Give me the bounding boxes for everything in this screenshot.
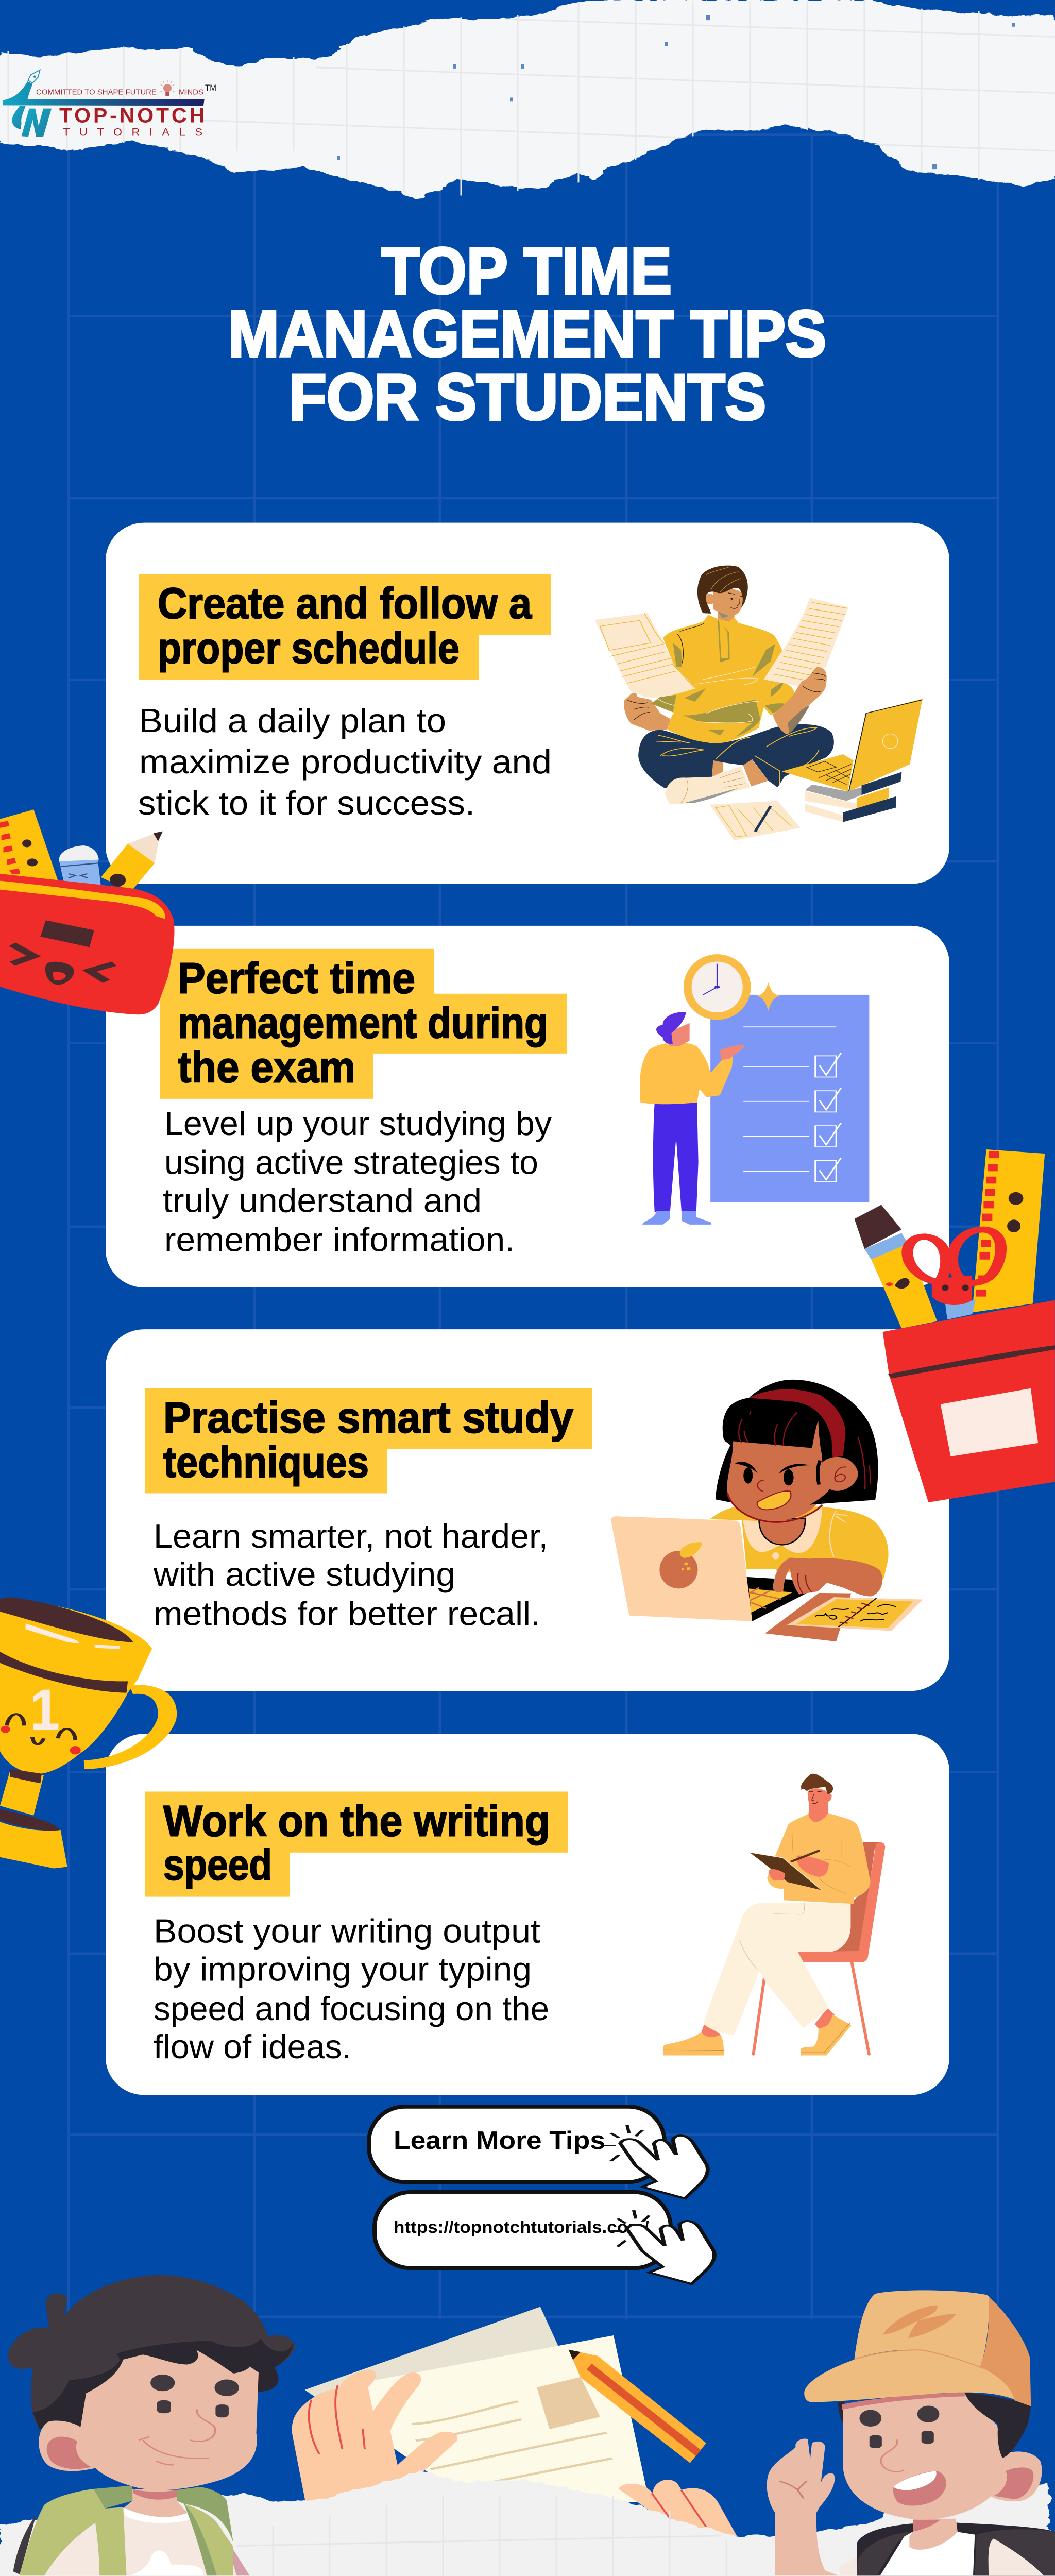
title: FOR STUDENTS bbox=[289, 361, 766, 434]
button: website url: https://topnotchtutorials.com/ bbox=[394, 2218, 649, 2237]
button: website url bbox=[375, 2192, 714, 2284]
button: learn more tips bbox=[369, 2107, 708, 2198]
logo: Top-Notch Tutorials: TM bbox=[205, 83, 216, 93]
text: boost your writing output: by improving your typing bbox=[154, 1951, 532, 1988]
icon: red cup with pencil, scissors and ruler bbox=[855, 1149, 1055, 1502]
heading: perfect time management during the exam: Perfect time bbox=[178, 955, 415, 1003]
heading: perfect time management during the exam bbox=[160, 949, 567, 1099]
text: build a daily plan bbox=[138, 702, 552, 822]
torn paper bottom bbox=[0, 2469, 1055, 2576]
case bbox=[0, 874, 174, 1014]
icon: red pencil case with stationery bbox=[0, 809, 174, 1014]
title: MANAGEMENT TIPS bbox=[228, 298, 826, 370]
text: learn smarter: with active studying bbox=[153, 1556, 455, 1593]
text: level up your studying: remember information. bbox=[164, 1221, 515, 1259]
heading: perfect time management during the exam: management during bbox=[178, 999, 548, 1047]
text: level up your studying: Level up your studying by bbox=[164, 1105, 552, 1142]
icon: student sitting with papers and laptop bbox=[595, 566, 923, 840]
icon: person at checklist with clock bbox=[640, 954, 869, 1225]
text: build a daily plan: stick to it for success. bbox=[138, 785, 475, 822]
icon: man writing on chair bbox=[663, 1774, 885, 2056]
text: boost your writing output: Boost your writing output bbox=[154, 1912, 540, 1950]
pencil and right hand bbox=[537, 2350, 737, 2537]
icon: yellow trophy: 1 bbox=[29, 1677, 60, 1742]
button: learn more tips: Learn More Tips bbox=[394, 2126, 605, 2155]
text: learn smarter: Learn smarter, not harder, bbox=[154, 1518, 548, 1555]
illustration: paper sheet and pencil held by hands bbox=[292, 2307, 737, 2537]
heading: work on the writing speed: speed bbox=[163, 1841, 272, 1889]
panel: perfect time management during the exam bbox=[106, 926, 949, 1287]
logo: Top-Notch Tutorials: COMMITTED TO SHAPE FUTURE bbox=[36, 89, 157, 97]
text: build a daily plan: maximize productivity and bbox=[139, 743, 552, 781]
logo: Top-Notch Tutorials: TOP-NOTCH bbox=[59, 104, 205, 127]
illustration: boy with green vest bbox=[8, 2275, 295, 2575]
text: learn smarter: methods for better recall. bbox=[154, 1595, 540, 1632]
heading: create and follow a proper schedule bbox=[139, 574, 551, 680]
icon: girl with laptop and notebook bbox=[611, 1380, 923, 1641]
sheets bbox=[305, 2307, 649, 2502]
heading: create and follow a proper schedule: Create and follow a bbox=[158, 580, 532, 628]
panel: work on the writing speed bbox=[106, 1734, 949, 2095]
title: TOP TIME bbox=[382, 235, 672, 308]
heading: practise smart study techniques bbox=[145, 1388, 592, 1493]
text: boost your writing output: flow of ideas. bbox=[154, 2028, 351, 2065]
pencil bbox=[101, 832, 163, 891]
logo mark: TN pen bbox=[3, 70, 205, 137]
icon: pointing hand bbox=[611, 2210, 714, 2284]
logo: Top-Notch Tutorials bbox=[3, 70, 216, 139]
text: boost your writing output: speed and focusing on the bbox=[154, 1990, 549, 2027]
text: level up your studying: using active strategies to bbox=[164, 1144, 538, 1181]
heading: create and follow a proper schedule: proper schedule bbox=[158, 624, 460, 673]
heading: practise smart study techniques: techniques bbox=[163, 1438, 369, 1487]
ruler bbox=[0, 809, 59, 884]
torn paper top bbox=[0, 0, 1055, 199]
panel: create and follow a proper schedule bbox=[106, 523, 949, 884]
heading: work on the writing speed: Work on the writing bbox=[163, 1797, 550, 1845]
illustration: boy with orange cap bbox=[767, 2290, 1055, 2575]
text: level up your studying bbox=[163, 1105, 552, 1259]
logo: Top-Notch Tutorials: TUTORIALS bbox=[63, 126, 202, 139]
text: level up your studying: truly understand and bbox=[163, 1182, 482, 1219]
eraser bbox=[59, 845, 101, 886]
heading: perfect time management during the exam: the exam bbox=[178, 1043, 355, 1092]
title bbox=[228, 235, 826, 434]
logo: Top-Notch Tutorials: MINDS bbox=[179, 89, 203, 97]
text: boost your writing output bbox=[154, 1912, 549, 2065]
panel: practise smart study techniques bbox=[106, 1329, 949, 1691]
text: learn smarter bbox=[153, 1518, 548, 1632]
heading: work on the writing speed bbox=[145, 1792, 568, 1897]
left hand bbox=[292, 2369, 457, 2503]
icon: pointing hand bbox=[604, 2125, 708, 2198]
text: build a daily plan: Build a daily plan to bbox=[139, 702, 446, 739]
heading: practise smart study techniques: Practise smart study bbox=[163, 1394, 573, 1442]
icon: yellow trophy bbox=[0, 1597, 167, 1869]
